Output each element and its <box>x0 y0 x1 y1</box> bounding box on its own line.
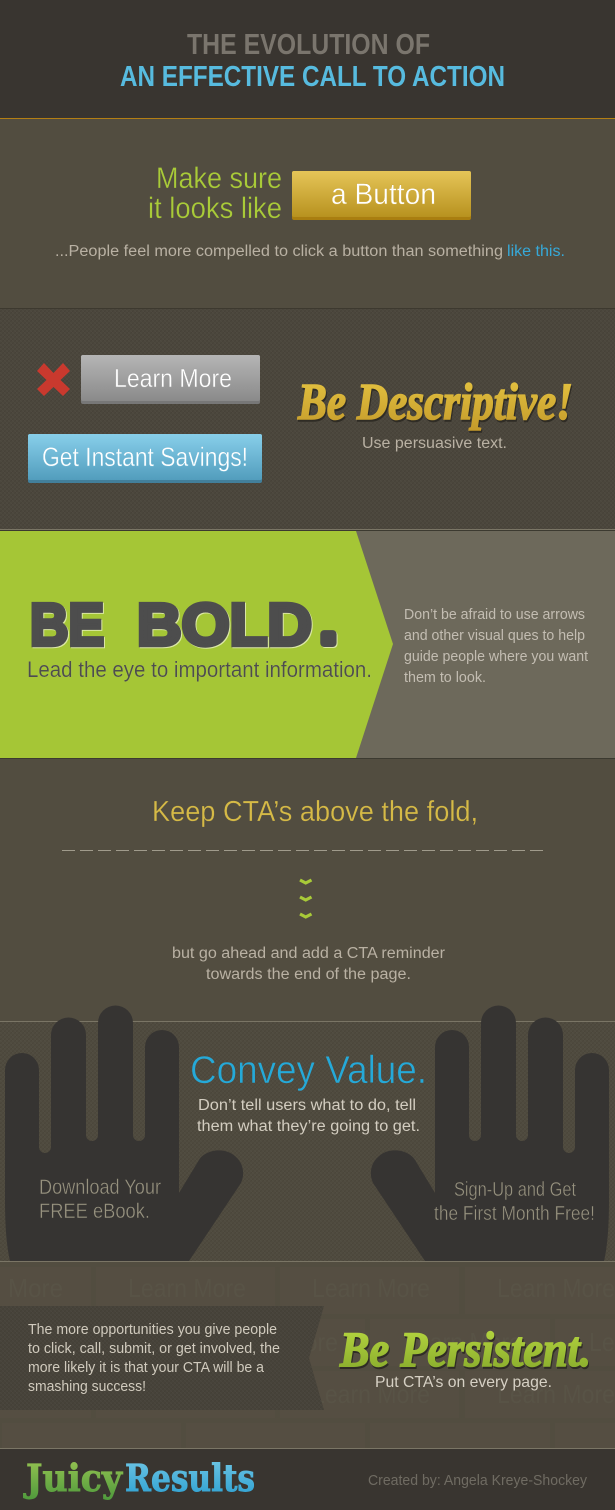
text: sign-up first month free <box>434 1179 595 1225</box>
button: learn more: Learn More <box>114 363 232 393</box>
text: people feel more compelled: ...People feel more compelled to click a button than something <box>55 243 503 260</box>
panel: be bold <box>0 530 615 759</box>
text: more opportunities: smashing success! <box>28 1379 146 1395</box>
ghost buttons: Learn More <box>220 1327 338 1357</box>
text: more opportunities: to click, call, submit, or get involved, the <box>28 1341 280 1357</box>
text: people feel more compelled: like this. <box>507 243 565 260</box>
heading: be persistent: Be Persistent. <box>339 1321 591 1377</box>
heading: make sure it looks like <box>148 162 282 225</box>
heading: make sure it looks like: it looks like <box>148 192 282 225</box>
arrow: green panel <box>0 531 393 758</box>
text: add a cta reminder <box>172 945 445 983</box>
text: arrows advice: and other visual ques to help <box>404 628 585 644</box>
text: add a cta reminder: towards the end of the page. <box>206 966 411 983</box>
text: use persuasive text: Use persuasive text. <box>362 435 507 452</box>
panel: keep cta above the fold <box>0 759 615 1022</box>
ghost buttons: Learn More <box>128 1273 246 1303</box>
ghost buttons: Learn More <box>312 1273 430 1303</box>
logo: juicyresults: Juicy <box>23 1456 123 1500</box>
section: header title: THE EVOLUTION OF <box>187 29 430 61</box>
text: more opportunities: The more opportunities you give people <box>28 1322 277 1338</box>
text: created by: Created by: Angela Kreye-Shockey <box>368 1473 588 1489</box>
icon: left hand <box>5 1006 243 1261</box>
text: arrows advice: them to look. <box>404 670 486 686</box>
text: download your free ebook: Download Your <box>39 1176 161 1199</box>
heading: be bold: BE <box>30 592 104 658</box>
section: header title <box>0 0 615 119</box>
button: a Button: a Button <box>331 178 436 211</box>
panel: convey value background <box>0 1021 615 1262</box>
panel: be descriptive <box>0 309 615 530</box>
text: arrows advice: Don’t be afraid to use arrows <box>404 607 585 623</box>
section: header title: AN EFFECTIVE CALL TO ACTION <box>120 61 505 93</box>
text: download your free ebook: FREE eBook. <box>39 1200 150 1223</box>
text: more opportunities <box>28 1322 280 1395</box>
button: learn more <box>81 355 260 404</box>
text: more opportunities: more likely it is that your CTA will be a <box>28 1360 265 1376</box>
button: a Button <box>292 171 471 220</box>
text: download your free ebook <box>39 1176 161 1223</box>
text: add a cta reminder: but go ahead and add a CTA reminder <box>172 945 445 962</box>
text: arrows advice: guide people where you want <box>404 649 588 665</box>
heading: keep cta's above the fold: Keep CTA’s above the fold, <box>152 796 478 828</box>
heading: be bold: BOLD <box>137 592 312 658</box>
heading: be bold <box>30 590 337 658</box>
text: don't tell users <box>197 1097 420 1135</box>
logo: juicyresults <box>23 1456 255 1500</box>
ghost buttons: Learn More <box>312 1379 430 1409</box>
heading: convey value: Convey Value. <box>190 1049 427 1092</box>
panel: be persistent <box>0 1262 615 1449</box>
button: get instant savings: Get Instant Savings! <box>42 442 248 472</box>
heading: make sure it looks like: Make sure <box>156 162 282 195</box>
ribbon banner <box>0 1306 324 1410</box>
button: get instant savings <box>28 434 262 483</box>
heading: be bold: . <box>320 590 337 656</box>
logo: juicyresults: Results <box>125 1456 255 1500</box>
text: sign-up first month free: Sign-Up and Get <box>454 1179 576 1201</box>
icon: chevrons <box>300 880 312 917</box>
text: sign-up first month free: the First Month Free! <box>434 1203 595 1225</box>
text: don't tell users: Don’t tell users what to do, tell <box>198 1097 416 1114</box>
text: arrows advice <box>404 607 588 686</box>
panel: make sure it looks like a button <box>0 119 615 309</box>
text: lead the eye: Lead the eye to important information. <box>27 657 372 682</box>
ghost buttons: Learn More <box>404 1327 522 1357</box>
text: put cta's on every page: Put CTA’s on every page. <box>375 1374 552 1391</box>
ghost buttons <box>0 1267 615 1448</box>
ghost buttons: More <box>8 1273 63 1303</box>
icon: right hand <box>371 1006 609 1261</box>
footer <box>0 1449 615 1510</box>
text: don't tell users: them what they’re going to get. <box>197 1118 420 1135</box>
icon: red x <box>37 363 70 396</box>
